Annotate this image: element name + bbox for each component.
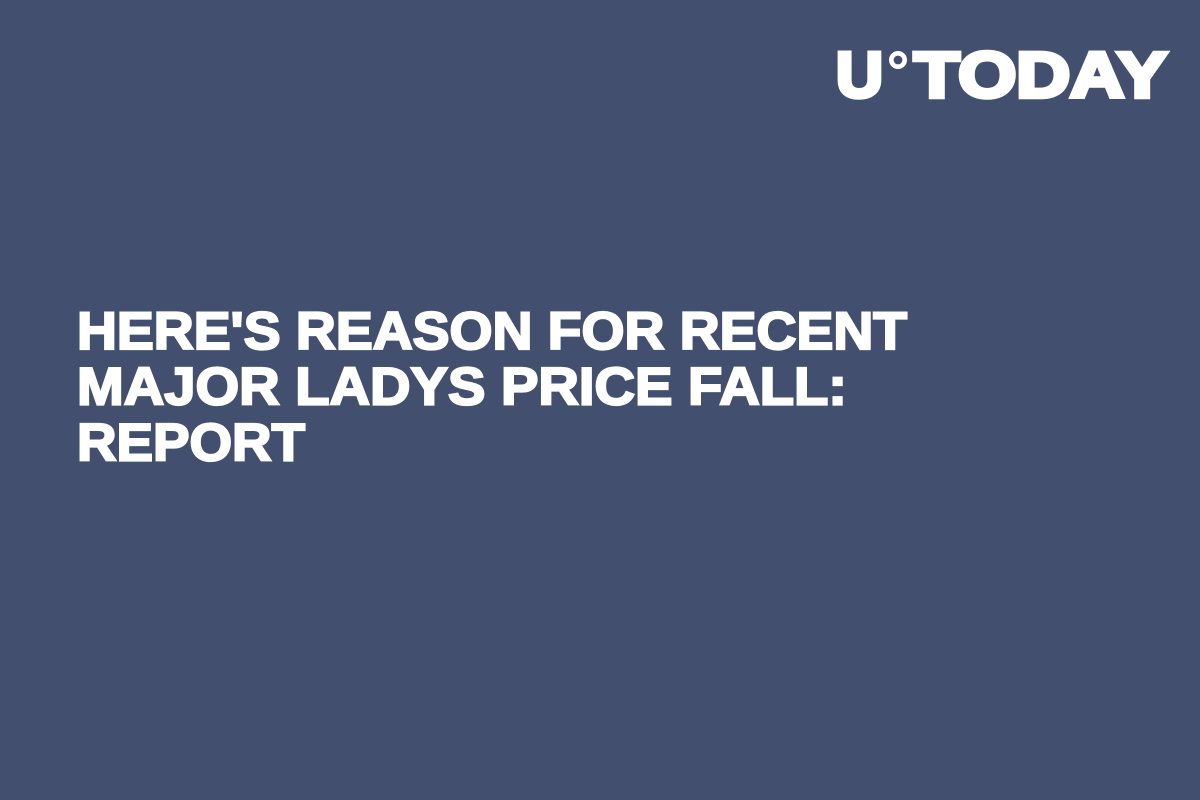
logo wordmark TODAY: TODAY (914, 39, 1167, 111)
logo: U.Today (836, 39, 1167, 111)
title line 1: HERE'S REASON FOR RECENT (77, 302, 907, 361)
logo degree ring (891, 53, 905, 67)
logo letter U: U (836, 39, 883, 111)
title headline (77, 302, 907, 472)
title line 2: MAJOR LADYS PRICE FALL: (77, 358, 847, 417)
title line 3: REPORT (77, 414, 305, 472)
